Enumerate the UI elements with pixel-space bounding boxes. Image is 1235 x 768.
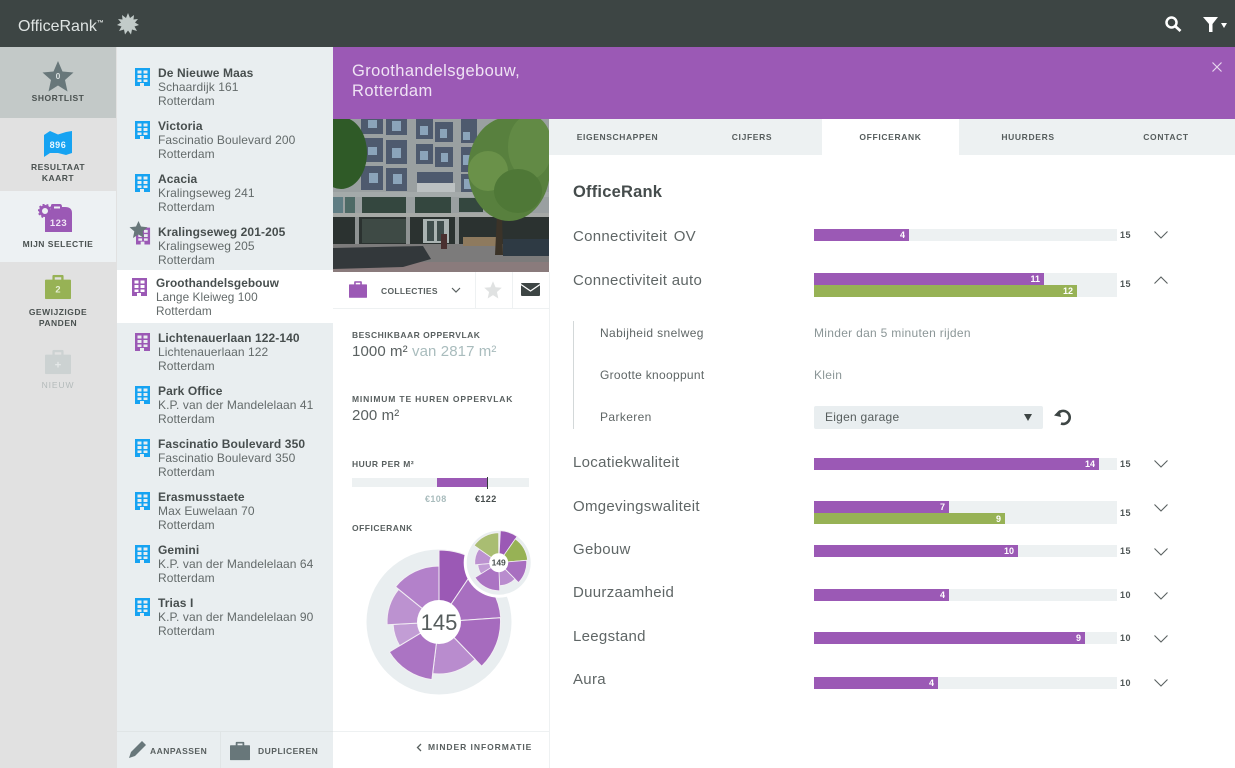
row label: duurzaamheid: Duurzaamheid <box>573 584 674 601</box>
list item: Acacia <box>158 172 255 214</box>
building name: Groothandelsgebouw, <box>352 62 520 80</box>
list item: Trias I: K.P. van der Mandelelaan 90 <box>158 610 313 624</box>
list item: Groothandelsgebouw <box>156 276 279 318</box>
bar: aura <box>814 677 1117 689</box>
detail label: nabijheid snelweg: Nabijheid snelweg <box>600 326 704 340</box>
bar: omgevingswaliteit <box>814 501 1117 524</box>
header: building title <box>333 47 1235 119</box>
icon: search <box>1165 16 1182 32</box>
collections toolbar <box>333 272 549 309</box>
stat value: 200 m² <box>352 407 399 424</box>
icon: filter <box>1203 17 1227 32</box>
icon: star with count <box>42 61 74 92</box>
building name <box>352 61 520 101</box>
list item: Erasmusstaete: Erasmusstaete <box>158 490 245 504</box>
list item: Victoria: Rotterdam <box>158 147 215 161</box>
list item: Fascinatio Boulevard 350 <box>158 437 305 479</box>
nav label <box>31 162 85 183</box>
list item: Victoria: Fascinatio Boulevard 200 <box>158 133 295 147</box>
sidebar navigation <box>0 47 117 768</box>
minder informatie link <box>333 731 549 768</box>
icon: map with count: 896 <box>50 140 66 150</box>
icon: pencil <box>129 741 146 758</box>
detail value: Minder dan 5 minuten rijden <box>814 326 971 340</box>
max value: 15 <box>1120 459 1131 469</box>
list item: Lichtenauerlaan <box>158 331 300 373</box>
nav label: RESULTAAT <box>31 162 85 172</box>
nav label: PANDEN <box>39 318 77 328</box>
big radial chart 145 <box>366 550 512 694</box>
bar: omgevingswaliteit: 9 <box>996 514 1001 524</box>
list item: Lichtenauerlaan: Lichtenauerlaan 122-140 <box>158 331 300 345</box>
row label: locatiekwaliteit: Locatiekwaliteit <box>573 454 680 471</box>
top bar <box>0 0 1235 47</box>
icon: chevron left <box>416 743 422 752</box>
list row: selected background <box>117 270 333 323</box>
icon: building purple with star <box>130 221 150 244</box>
detail label: parkeren: Parkeren <box>600 410 652 424</box>
detail value: Klein <box>814 368 842 382</box>
icon: chevron <box>1153 459 1169 469</box>
icon: building purple <box>132 278 147 296</box>
select value: Eigen garage <box>825 410 899 424</box>
icon: building blue <box>135 121 150 139</box>
list item: Gemini: Gemini <box>158 543 199 557</box>
list item: Gemini <box>158 543 313 585</box>
max value: 15 <box>1120 508 1131 518</box>
list item: Kralingseweg: Kralingseweg 205 <box>158 239 255 253</box>
tab bar background <box>549 119 1235 155</box>
select: eigen garage <box>814 406 1043 429</box>
nav: shortlist background <box>0 47 116 118</box>
icon: case with gear: 123 <box>50 218 67 229</box>
nav label: GEWIJZIGDE <box>29 307 87 317</box>
tab: officerank active: OFFICERANK <box>859 132 922 142</box>
nav label: MIJN SELECTIE <box>23 239 93 249</box>
icon: building blue <box>135 386 150 404</box>
icon: chevron down <box>451 287 461 294</box>
icon: chevron <box>1153 547 1169 557</box>
list item: Park Office <box>158 384 313 426</box>
max value: 15 <box>1120 546 1131 556</box>
list item: Kralingseweg <box>158 225 285 267</box>
detail group rule <box>573 321 574 429</box>
icon: building blue <box>135 439 150 457</box>
max value: 15 <box>1120 230 1131 240</box>
tab: cijfers: CIJFERS <box>732 132 772 142</box>
icon: building purple <box>135 333 150 351</box>
list item: Fascinatio Boulevard 350: Rotterdam <box>158 465 215 479</box>
bar: duurzaamheid: 4 <box>940 590 945 600</box>
icon: chevron <box>1153 591 1169 601</box>
nav label: SHORTLIST <box>32 93 84 103</box>
list item: Lichtenauerlaan: Lichtenauerlaan 122 <box>158 345 268 359</box>
icon: dropdown arrow <box>1024 414 1032 421</box>
list footer actions <box>117 731 333 768</box>
max value: 15 <box>1120 279 1131 289</box>
action label: dupliceren: DUPLICEREN <box>258 746 318 756</box>
icon: green case <box>45 274 71 300</box>
big radial chart 145: 145 <box>421 610 457 635</box>
list item: Victoria: Victoria <box>158 119 203 133</box>
toolbar divider left <box>475 272 476 308</box>
nav item: nieuw <box>42 350 74 390</box>
bar: leegstand: 9 <box>1076 633 1081 643</box>
bar: locatiekwaliteit: 14 <box>1085 459 1095 469</box>
detail label: grootte knooppunt: Grootte knooppunt <box>600 368 705 382</box>
list item: Acacia: Acacia <box>158 172 197 186</box>
panel: property details <box>333 272 550 768</box>
small radial chart 149 <box>464 528 534 598</box>
list item: Park Office: Rotterdam <box>158 412 215 426</box>
bar: locatiekwaliteit <box>814 458 1117 470</box>
icon: building blue <box>135 492 150 510</box>
bar: connectiviteit ov <box>814 229 1117 241</box>
stat value: 1000 m² van 2817 m² <box>352 343 496 360</box>
tab: eigenschappen: EIGENSCHAPPEN <box>577 132 658 142</box>
tab: huurders: HUURDERS <box>1001 132 1055 142</box>
nav label <box>29 307 87 328</box>
list item: De Nieuwe Maas <box>158 66 253 108</box>
list item: Acacia: Rotterdam <box>158 200 215 214</box>
list item: Erasmusstaete: Rotterdam <box>158 518 215 532</box>
list item: Fascinatio Boulevard 350: Fascinatio Boulevard 350 <box>158 437 305 451</box>
nav item: gewijzigde panden <box>29 274 87 328</box>
range track <box>352 478 529 487</box>
icon: chevron <box>1153 678 1169 688</box>
row label: connectiviteit auto: Connectiviteit auto <box>573 272 702 289</box>
icon: green case: 2 <box>55 285 61 295</box>
list item: Fascinatio Boulevard 350: Fascinatio Boulevard 350 <box>158 451 295 465</box>
nav item: mijn selectie <box>23 204 93 249</box>
icon: new case <box>45 350 71 374</box>
row label: aura: Aura <box>573 671 606 688</box>
bar: gebouw <box>814 545 1117 557</box>
icon: new case: + <box>55 360 62 372</box>
bar: omgevingswaliteit: 7 <box>940 502 945 512</box>
icon: purple case <box>349 281 367 298</box>
list item: Trias I: Trias I <box>158 596 193 610</box>
list item: Kralingseweg: Kralingseweg 201-205 <box>158 225 285 239</box>
stat label: MINIMUM TE HUREN OPPERVLAK <box>352 394 513 404</box>
bar: gebouw: 10 <box>1004 546 1014 556</box>
building photo <box>333 119 549 272</box>
icon: building blue <box>135 598 150 616</box>
bar: duurzaamheid <box>814 589 1117 601</box>
footer divider <box>220 732 221 768</box>
max value: 10 <box>1120 678 1131 688</box>
list item: Groothandelsgebouw: Lange Kleiweg 100 <box>156 290 258 304</box>
icon: mail <box>521 283 540 296</box>
chart: officerank radial charts <box>333 500 549 710</box>
row label: gebouw: Gebouw <box>573 541 631 558</box>
heading: officerank: OFFICERANK <box>352 523 413 533</box>
stat: minimum te huren oppervlak <box>352 394 542 426</box>
stat: beschikbaar oppervlak <box>352 330 542 362</box>
icon: star with count: 0 <box>56 71 61 81</box>
bar: connectiviteit ov: 4 <box>900 230 905 240</box>
nav label: NIEUW <box>42 380 74 390</box>
high price: €122 <box>475 494 497 504</box>
list item: Acacia: Kralingseweg 241 <box>158 186 255 200</box>
row label: omgevingswaliteit: Omgevingswaliteit <box>573 498 700 515</box>
icon: chevron <box>1153 503 1169 513</box>
nav item: resultaat kaart <box>31 131 85 183</box>
tab: officerank active <box>822 119 959 155</box>
label: HUUR PER M² <box>352 459 414 469</box>
range fill <box>437 478 487 487</box>
list item: Groothandelsgebouw: Groothandelsgebouw <box>156 276 279 290</box>
icon: close <box>1212 62 1222 72</box>
icon: logo burst <box>117 13 139 34</box>
nav: mijn selectie background <box>0 191 116 262</box>
list item: Erasmusstaete <box>158 490 255 532</box>
list item: Lichtenauerlaan: Rotterdam <box>158 359 215 373</box>
bar: aura: 4 <box>929 678 934 688</box>
bar: leegstand <box>814 632 1117 644</box>
list item: Park Office: K.P. van der Mandelelaan 41 <box>158 398 313 412</box>
heading: officerank: OfficeRank <box>573 183 662 201</box>
list item: Trias I: Rotterdam <box>158 624 215 638</box>
icon: map with count <box>44 131 72 157</box>
building name: Rotterdam <box>352 82 433 100</box>
max value: 10 <box>1120 633 1131 643</box>
bar: connectiviteit auto <box>814 273 1117 297</box>
bar: connectiviteit auto: 12 <box>1063 286 1073 296</box>
list item: Trias I <box>158 596 313 638</box>
panel: property list <box>117 47 333 768</box>
max value: 10 <box>1120 590 1131 600</box>
list item: De Nieuwe Maas: Rotterdam <box>158 94 215 108</box>
rent per m2 range <box>352 459 542 507</box>
icon: building blue <box>135 174 150 192</box>
icon: reset <box>1053 408 1072 426</box>
icon: chevron <box>1153 230 1169 240</box>
list item: Victoria <box>158 119 295 161</box>
tab: contact: CONTACT <box>1143 132 1189 142</box>
bar: connectiviteit auto: 11 <box>1030 274 1040 284</box>
link text: MINDER INFORMATIE <box>428 742 532 752</box>
row label: leegstand: Leegstand <box>573 628 646 645</box>
small radial chart 149: 149 <box>492 558 506 568</box>
list item: Park Office: Park Office <box>158 384 222 398</box>
list item: Kralingseweg: Rotterdam <box>158 253 215 267</box>
row label: connectiviteit ov: Connectiviteit OV <box>573 228 696 245</box>
range marker <box>487 477 488 489</box>
action label: aanpassen: AANPASSEN <box>150 746 207 756</box>
label: collecties: COLLECTIES <box>381 286 438 296</box>
icon: building blue <box>135 68 150 86</box>
list item: De Nieuwe Maas: De Nieuwe Maas <box>158 66 253 80</box>
icon: building blue <box>135 545 150 563</box>
list item: Erasmusstaete: Max Euwelaan 70 <box>158 504 255 518</box>
icon: chevron up <box>1153 275 1169 285</box>
low price: €108 <box>425 494 447 504</box>
icon: case <box>230 742 250 760</box>
list item: Gemini: Rotterdam <box>158 571 215 585</box>
list item: Gemini: K.P. van der Mandelelaan 64 <box>158 557 313 571</box>
toolbar divider right <box>512 272 513 308</box>
icon: case with gear <box>38 204 72 232</box>
nav item: shortlist <box>32 61 84 103</box>
nav label: KAART <box>42 173 74 183</box>
icon: chevron <box>1153 634 1169 644</box>
icon: favourite star <box>484 281 502 299</box>
stat label: BESCHIKBAAR OPPERVLAK <box>352 330 480 340</box>
logo wordmark: OfficeRank™ <box>18 18 104 35</box>
list item: De Nieuwe Maas: Schaardijk 161 <box>158 80 239 94</box>
list item: Groothandelsgebouw: Rotterdam <box>156 304 212 318</box>
